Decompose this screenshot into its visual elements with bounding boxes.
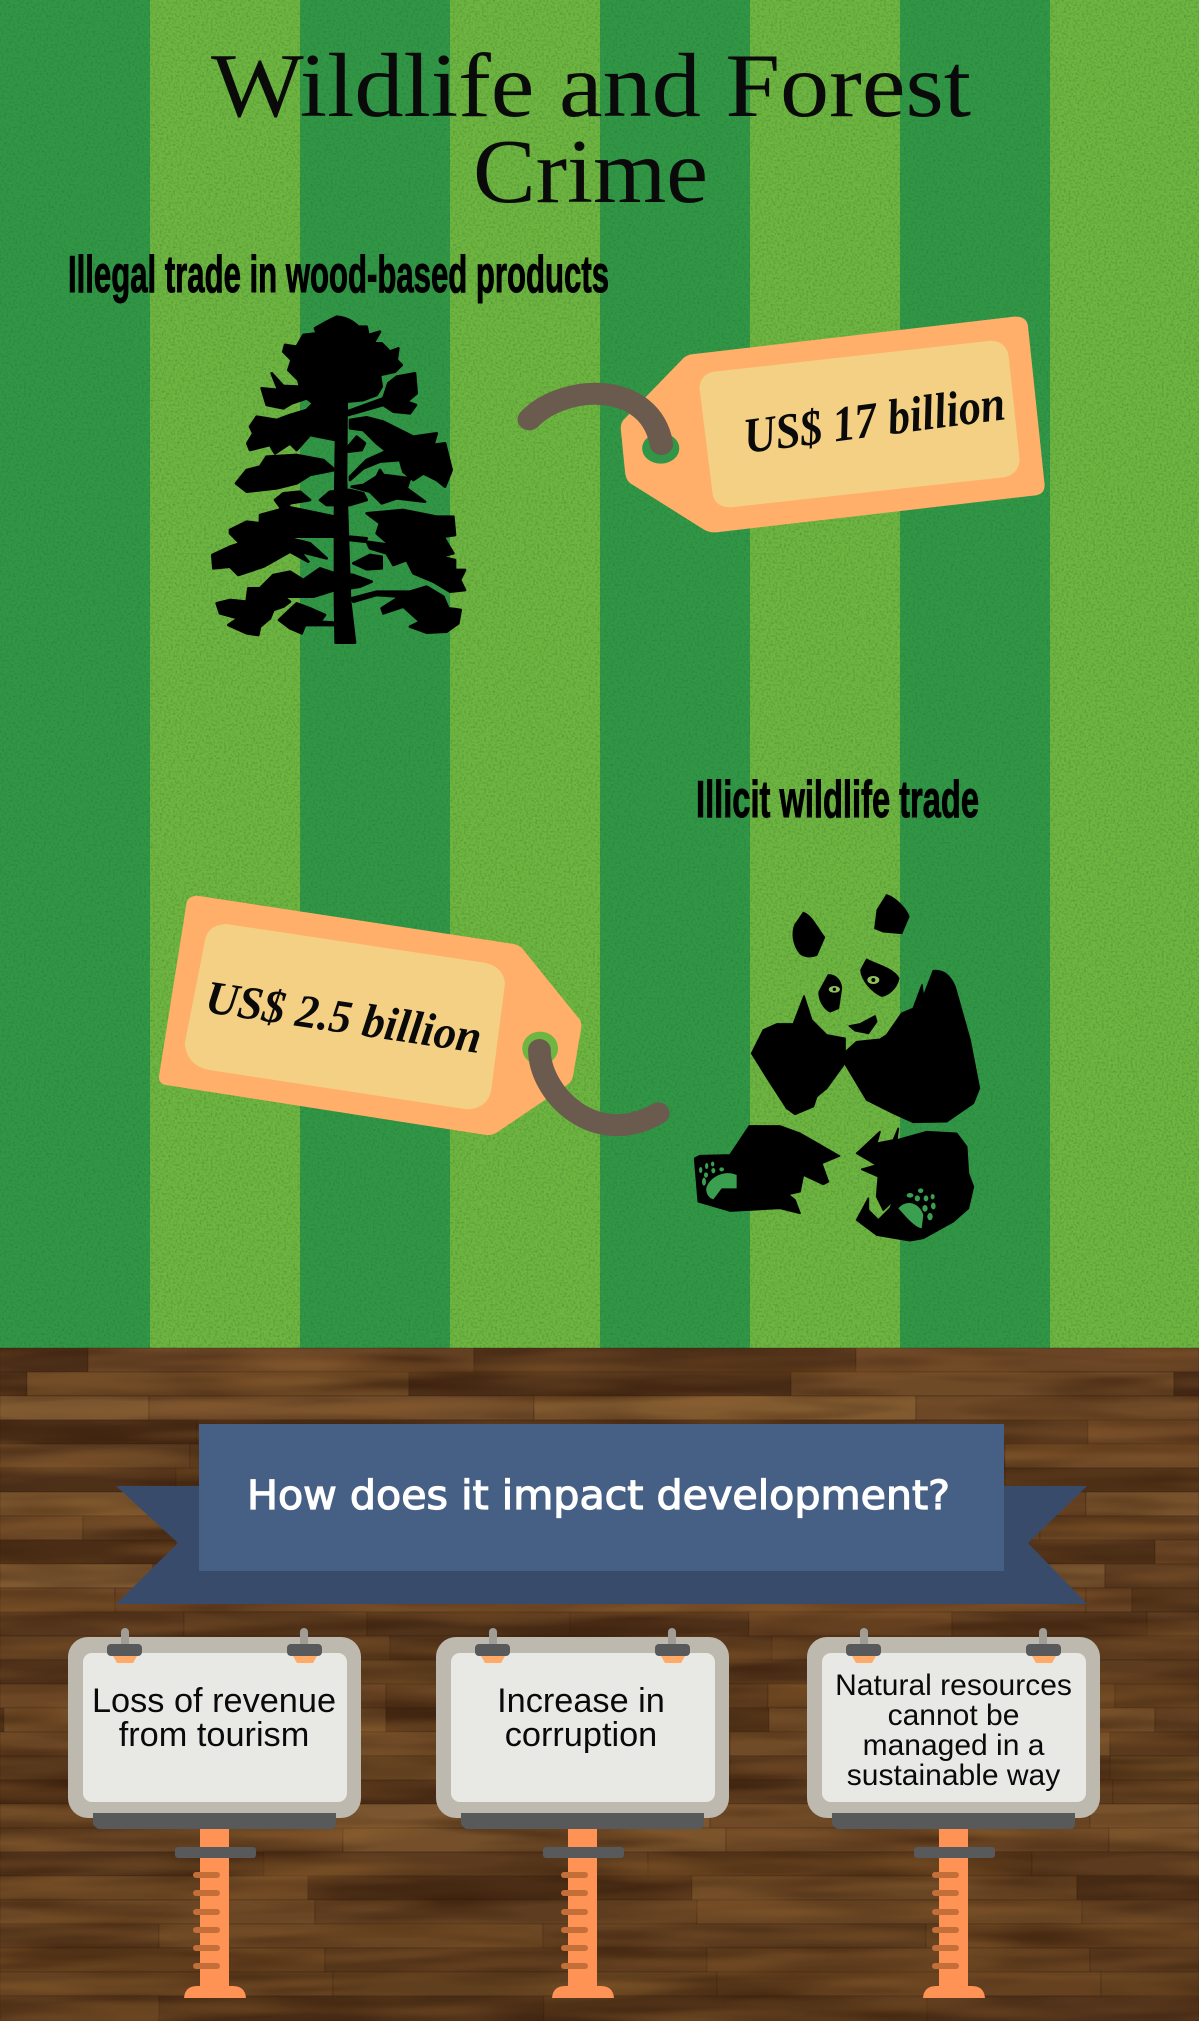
icon: panda silhouette bbox=[695, 895, 979, 1241]
price tag: US$ 2.5 billion: US$ 2.5 billion bbox=[202, 971, 485, 1064]
sign 3: natural resources bbox=[807, 1628, 1100, 1998]
sign 1: loss of revenue: Loss of revenue bbox=[92, 1682, 336, 1720]
heading: illicit wildlife trade: Illicit wildlife trade bbox=[696, 771, 979, 829]
green striped background bbox=[0, 0, 1199, 1348]
price tag: US$ 17 billion bbox=[529, 317, 1045, 532]
sign 3: natural resources: cannot be bbox=[888, 1699, 1019, 1732]
sign 1: loss of revenue bbox=[68, 1628, 361, 1998]
sign 2: increase in corruption: Increase in bbox=[497, 1682, 665, 1720]
title: Crime bbox=[473, 121, 708, 222]
banner: how does it impact development: How does it impact development? bbox=[247, 1473, 950, 1519]
sign 3: natural resources: Natural resources bbox=[835, 1669, 1072, 1702]
wood floor background bbox=[0, 1348, 1199, 2021]
sign 3: natural resources: managed in a bbox=[863, 1729, 1045, 1762]
price tag: US$ 2.5 billion bbox=[159, 896, 658, 1135]
sign 1: loss of revenue: from tourism bbox=[119, 1716, 309, 1754]
title bbox=[211, 35, 971, 222]
sign 2: increase in corruption bbox=[436, 1628, 729, 1998]
title: Wildlife and Forest bbox=[211, 35, 971, 136]
heading: illegal trade in wood-based products: Illegal trade in wood-based products bbox=[68, 246, 609, 304]
sign 3: natural resources: sustainable way bbox=[847, 1759, 1060, 1792]
icon: tree silhouette bbox=[212, 317, 465, 643]
price tag: US$ 17 billion: US$ 17 billion bbox=[740, 375, 1008, 464]
banner: how does it impact development bbox=[116, 1424, 1087, 1604]
sign 2: increase in corruption: corruption bbox=[505, 1716, 657, 1754]
